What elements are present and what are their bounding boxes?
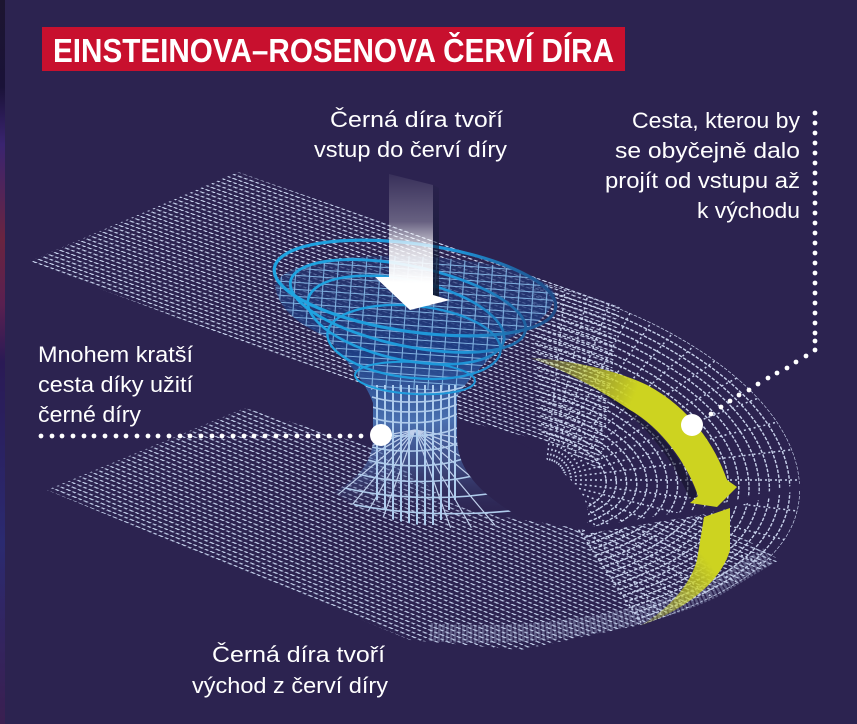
yellow path arrow — [530, 358, 737, 626]
curved fold of the sheet — [530, 279, 800, 625]
label: shorter path: Mnohem kratší — [38, 342, 194, 367]
label: ordinary path: k východu — [697, 198, 800, 223]
label: shorter path — [38, 342, 194, 427]
funnel blue rings — [268, 225, 562, 397]
dotted line: long path — [709, 111, 817, 416]
funnel grid — [276, 256, 554, 528]
upper sheet — [28, 172, 620, 470]
lower segment — [640, 508, 730, 626]
white entry arrow — [375, 174, 450, 310]
left edge strip — [0, 0, 5, 724]
lower fold highlight — [430, 556, 768, 634]
label: entry: vstup do červí díry — [314, 137, 508, 162]
label: exit: východ z červí díry — [192, 673, 389, 698]
label: ordinary path: Cesta, kterou by — [632, 108, 801, 133]
funnel body — [275, 256, 555, 528]
label: ordinary path: projít od vstupu až — [605, 168, 800, 193]
gap in the fold — [585, 486, 803, 531]
hole between sheets — [451, 422, 588, 530]
dotted line: short path — [39, 434, 363, 438]
arrow shadow — [560, 372, 698, 500]
label: entry — [314, 107, 508, 162]
leader dots — [39, 111, 817, 446]
label: shorter path: černé díry — [38, 402, 142, 427]
label: ordinary path: se obyčejně dalo — [615, 138, 800, 163]
marker on yellow arrow — [681, 414, 703, 436]
label: ordinary path — [605, 108, 801, 223]
label: exit — [192, 642, 389, 698]
wormhole funnel — [272, 238, 558, 528]
marker on funnel throat — [370, 424, 392, 446]
label: exit: Černá díra tvoří — [212, 642, 386, 667]
label: entry: Černá díra tvoří — [330, 107, 504, 132]
arrow shadow — [433, 185, 439, 298]
title banner: EINSTEINOVA–ROSENOVA ČERVÍ DÍRA — [53, 31, 614, 69]
label: shorter path: cesta díky užití — [38, 372, 194, 397]
lower sheet — [47, 408, 780, 650]
arrow body — [375, 174, 450, 310]
upper segment — [530, 358, 737, 507]
spacetime fabric mesh — [30, 172, 800, 650]
